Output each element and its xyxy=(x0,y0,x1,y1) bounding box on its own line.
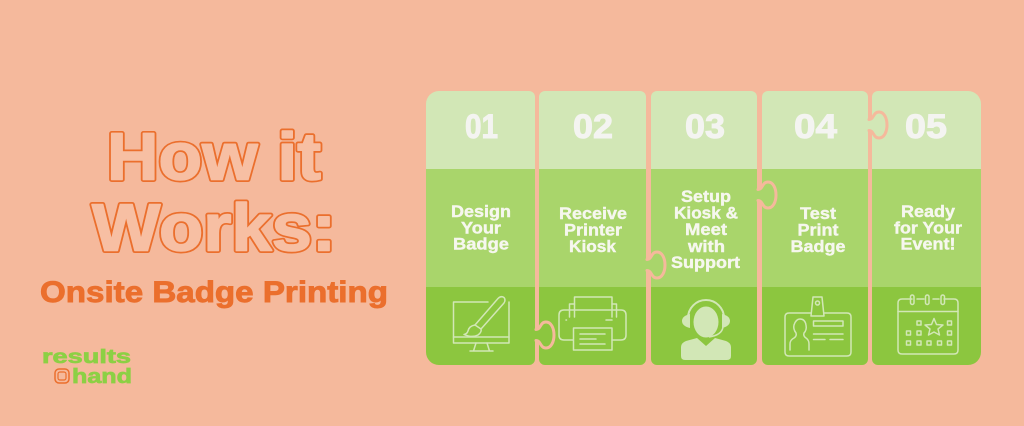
panel: step 4 xyxy=(762,91,868,365)
label: Test Print Badge: Print xyxy=(798,222,839,240)
icon: support agent with headset xyxy=(681,300,731,360)
number 02: 02 xyxy=(573,108,613,146)
title: How it Works: How it xyxy=(107,120,321,194)
puzzle tab: step 3 to 4 xyxy=(756,182,776,208)
label: Ready for Your Event!: for Your xyxy=(894,220,963,238)
label: Receive Printer Kiosk: Kiosk xyxy=(569,238,617,256)
label: Receive Printer Kiosk: Receive xyxy=(559,205,627,223)
label: Setup Kiosk & Meet with Support: Kiosk & xyxy=(674,204,738,222)
subtitle: Onsite Badge Printing xyxy=(40,276,388,309)
logo: results at hand: hand xyxy=(72,366,132,388)
icon: monitor with paintbrush xyxy=(454,297,509,351)
label: Receive Printer Kiosk xyxy=(559,205,627,256)
number 03: 03 xyxy=(685,108,725,146)
panel: step 3 xyxy=(651,91,757,365)
logo: results at hand xyxy=(42,347,132,388)
label: Receive Printer Kiosk: Printer xyxy=(564,222,623,240)
label: Setup Kiosk & Meet with Support: Support xyxy=(671,254,741,272)
number 04: 04 xyxy=(794,108,837,146)
number 01: 01 xyxy=(465,108,498,146)
label: Setup Kiosk & Meet with Support: with xyxy=(687,238,725,256)
title: How it Works: Works: xyxy=(92,190,336,266)
logo: results at hand: results xyxy=(42,347,131,368)
icon: printer xyxy=(559,297,626,350)
label: Setup Kiosk & Meet with Support: Setup xyxy=(681,188,731,206)
puzzle tab: step 1 to 2 xyxy=(534,322,554,348)
panel: step 1 xyxy=(426,91,535,365)
label: Design Your Badge: Badge xyxy=(453,236,509,254)
puzzle tab: step 4 to 5 xyxy=(867,112,887,138)
label: Design Your Badge: Design xyxy=(451,203,511,221)
label: Ready for Your Event! xyxy=(894,203,963,254)
label: Design Your Badge: Your xyxy=(461,220,502,238)
puzzle tab: step 2 to 3 xyxy=(645,252,665,278)
panel: step 2 xyxy=(539,91,646,365)
icon: ID badge xyxy=(785,297,851,356)
label: Test Print Badge: Badge xyxy=(790,238,846,256)
title: How it Works xyxy=(92,120,336,266)
title: How it Works: How it xyxy=(107,120,321,194)
label: Ready for Your Event!: Event! xyxy=(900,236,956,254)
number 05: 05 xyxy=(905,108,947,146)
label: Setup Kiosk & Meet with Support: Meet xyxy=(685,221,728,239)
label: Setup Kiosk & Meet with Support xyxy=(671,188,741,272)
icon: calendar with star xyxy=(898,295,958,354)
label: Test Print Badge xyxy=(790,205,846,256)
panel: step 5 xyxy=(872,91,981,365)
label: Test Print Badge: Test xyxy=(800,205,837,223)
title: How it Works: Works: xyxy=(92,190,336,266)
label: Design Your Badge xyxy=(451,203,511,254)
label: Ready for Your Event!: Ready xyxy=(901,203,956,221)
